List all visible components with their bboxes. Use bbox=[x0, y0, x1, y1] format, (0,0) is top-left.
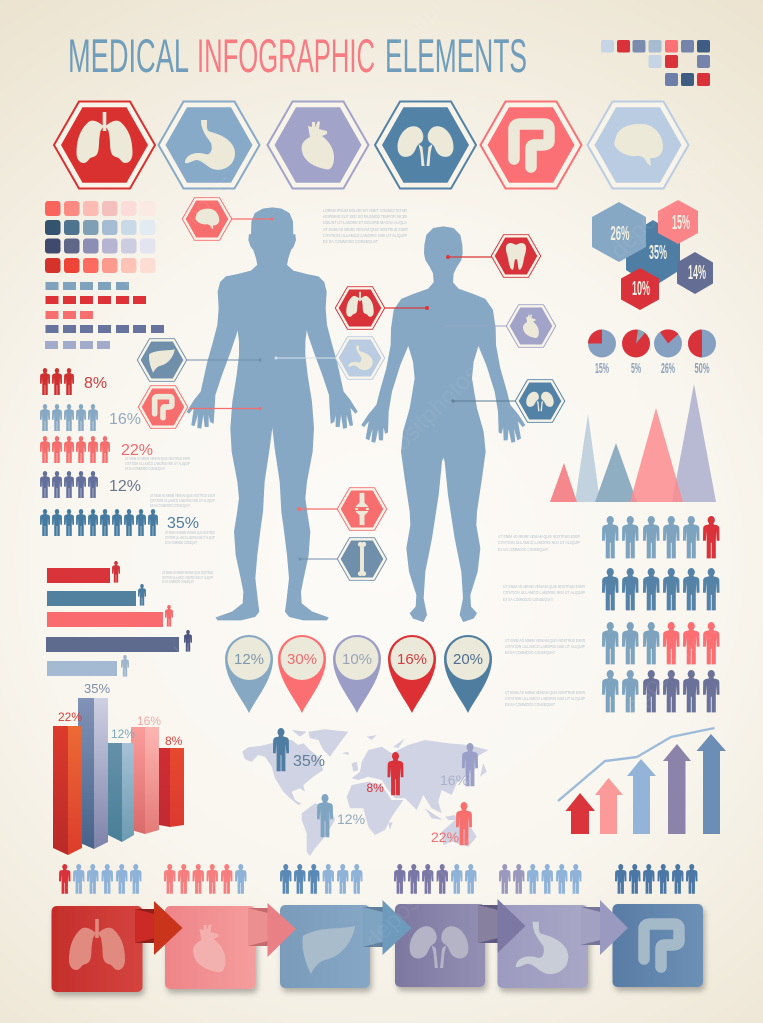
row 22%: 22% bbox=[121, 442, 153, 459]
row 16%: 16% bbox=[109, 411, 141, 428]
callout: knee joint bbox=[297, 488, 387, 530]
icon: panel stomach bbox=[516, 922, 568, 974]
watermark: depositphotos bbox=[360, 359, 485, 484]
callout: lungs bbox=[335, 287, 429, 329]
pin 10%: 10% bbox=[342, 651, 372, 668]
japan bbox=[480, 763, 487, 777]
small caption text left: UT ENIM AD MINIM VENIAM QUIS NOSTRUD bbox=[162, 570, 213, 575]
people grid right bbox=[602, 516, 720, 712]
hexagon cluster chart: 14% bbox=[688, 262, 706, 284]
male body silhouette bbox=[187, 208, 357, 620]
colour swatch palette bbox=[45, 201, 156, 273]
lorem text blocks right: UT ENIM AD MINIM VENIAM QUIS NOSTRUD EXER bbox=[505, 638, 585, 643]
3D bar chart: 12% bbox=[111, 727, 135, 741]
segmented bars bbox=[45, 282, 164, 349]
marker 35% bbox=[273, 728, 325, 771]
row 12% bbox=[40, 471, 141, 498]
pie 15%: 15% bbox=[595, 360, 609, 377]
arrow 5 bbox=[580, 900, 628, 955]
trend line bbox=[558, 728, 714, 801]
small caption text left: UT ENIM AD MINIM VENIAM QUIS NOSTRUD EXER bbox=[150, 493, 215, 498]
lorem text blocks right: CITATION ULLAMCO LABORIS NISI UT ALIQUIP bbox=[505, 696, 585, 701]
lorem text block centre: LOREM IPSUM DOLOR SIT AMET CONSECTETUR bbox=[323, 208, 408, 213]
lorem text blocks right: CITATION ULLAMCO LABORIS NISI UT ALIQUIP bbox=[503, 590, 585, 595]
group 2 bbox=[164, 864, 246, 894]
marker 35%: 35% bbox=[293, 753, 325, 770]
arrow 5 bbox=[696, 734, 726, 834]
watermark: depositphotos bbox=[115, 169, 240, 294]
hexagon cluster chart: 35% bbox=[649, 242, 667, 264]
row 35% bbox=[40, 509, 199, 536]
britain bbox=[352, 762, 358, 772]
female body silhouette bbox=[362, 227, 525, 622]
pie 5%: 5% bbox=[631, 360, 641, 377]
pie 26%: 26% bbox=[661, 360, 675, 377]
arrow 4 bbox=[478, 899, 526, 953]
marker 8% bbox=[366, 752, 404, 795]
icon: panel heart bbox=[193, 924, 226, 972]
lorem text block centre bbox=[323, 208, 409, 244]
lorem text blocks right bbox=[498, 534, 585, 707]
callout: bone bbox=[298, 538, 387, 580]
3D bar chart bbox=[53, 681, 184, 855]
australia bbox=[442, 820, 477, 847]
eurasia bbox=[352, 740, 488, 813]
group 6 bbox=[615, 864, 698, 894]
icon: brain hexagon bbox=[588, 102, 688, 188]
lorem text blocks right: CITATION ULLAMCO LABORIS NISI UT ALIQUIP bbox=[498, 540, 580, 545]
marker 22%: 22% bbox=[431, 829, 459, 845]
pin 16%: 16% bbox=[397, 651, 427, 668]
triangle chart bbox=[550, 384, 716, 502]
icon: kidneys hexagon bbox=[375, 102, 476, 188]
small caption text left: EX EA COMMODO CONSEQUAT bbox=[150, 503, 190, 508]
people percentage rows bbox=[40, 368, 199, 536]
pin 30%: 30% bbox=[287, 651, 317, 668]
small caption text left bbox=[125, 456, 215, 584]
lorem text blocks right: EX EA COMMODO CONSEQUAT bbox=[505, 650, 555, 655]
row 8%: 8% bbox=[84, 375, 107, 392]
row 22% bbox=[40, 436, 153, 463]
arrow 2 bbox=[595, 778, 623, 834]
novaya zemlya bbox=[393, 738, 405, 748]
callout: tooth bbox=[446, 235, 541, 277]
rising arrows chart bbox=[558, 728, 726, 834]
svalbard bbox=[367, 735, 377, 740]
arrow 1 bbox=[135, 901, 182, 955]
callout: kidneys bbox=[451, 380, 565, 422]
new guinea bbox=[445, 815, 458, 820]
watermark bbox=[105, 0, 735, 954]
arctic island bbox=[292, 730, 307, 737]
pin 20%: 20% bbox=[453, 651, 483, 668]
small caption text left: EX EA COMMODO CONSEQUAT bbox=[125, 466, 165, 471]
iceland bbox=[342, 752, 349, 755]
pin 12%: 12% bbox=[234, 651, 264, 668]
pie 50%: 50% bbox=[694, 360, 710, 377]
title: INFOGRAPHIC bbox=[197, 29, 375, 82]
arrow 4 bbox=[663, 744, 691, 834]
row 35%: 35% bbox=[167, 515, 199, 532]
arrow 3 bbox=[362, 900, 412, 955]
greenland bbox=[308, 729, 348, 757]
small caption text left: EX EA COMMODO CONSEQUAT bbox=[162, 579, 194, 584]
lorem text blocks right: EX EA COMMODO CONSEQUAT bbox=[503, 597, 553, 602]
pin 10% bbox=[333, 635, 381, 713]
watermark: depositphotos bbox=[610, 604, 735, 729]
people above panels bbox=[59, 864, 698, 894]
lorem text blocks right: EX EA COMMODO CONSEQUAT bbox=[505, 702, 555, 707]
lorem text block centre: DIDUNT UT LABORE ET DOLORE MAGNA ALIQUA bbox=[323, 220, 408, 225]
callout: liver bbox=[137, 339, 262, 381]
pin 20% bbox=[444, 635, 492, 713]
icon: lungs hexagon bbox=[54, 102, 155, 188]
arrow 2 bbox=[248, 903, 296, 957]
madagascar bbox=[388, 822, 393, 830]
pin 16% bbox=[388, 635, 436, 713]
south america bbox=[302, 803, 335, 856]
panel: heart bbox=[165, 906, 256, 989]
pin 30% bbox=[278, 635, 326, 713]
small caption text left: CITATION ULLAMCO LABORIS NISI UT ALIQUIP bbox=[150, 498, 215, 503]
marker 8%: 8% bbox=[366, 781, 384, 795]
panel: intestine bbox=[612, 904, 703, 987]
icon: heart hexagon bbox=[268, 102, 368, 188]
north america bbox=[242, 740, 323, 805]
group 5 bbox=[499, 864, 582, 894]
lorem text block centre: UT ENIM AD MINIM VENIAM QUIS NOSTRUD EXER bbox=[323, 227, 409, 232]
lorem text blocks right: EX EA COMMODO CONSEQUAT bbox=[498, 547, 548, 552]
world map bbox=[242, 729, 488, 856]
group 1 bbox=[59, 864, 142, 894]
hexagon cluster chart: 15% bbox=[672, 212, 690, 234]
icon: panel intestine bbox=[644, 924, 679, 967]
row 12%: 12% bbox=[109, 478, 141, 495]
row 8% bbox=[40, 368, 107, 395]
grid row 3 bbox=[602, 622, 720, 664]
indonesia bbox=[425, 808, 443, 820]
icon: stomach hexagon bbox=[158, 102, 260, 188]
pin 12% bbox=[225, 635, 273, 713]
callout: intestine bbox=[138, 386, 262, 428]
grid row 2 bbox=[602, 568, 720, 610]
watermark: depositphotos bbox=[605, 139, 730, 264]
lorem text block centre: ADIPISING ELIT SED DO EIUSMOD TEMPOR INCIDI bbox=[323, 214, 407, 219]
lorem text block centre: EX EA COMMODO CONSEQUAT bbox=[323, 239, 378, 244]
map markers bbox=[273, 728, 478, 845]
marker 16%: 16% bbox=[440, 772, 468, 788]
process panels with arrows bbox=[52, 899, 703, 992]
lorem text blocks right: UT ENIM AD MINIM VENIAM QUIS NOSTRUD EXER bbox=[505, 690, 585, 695]
callout: brain bbox=[182, 198, 274, 240]
panel: lungs bbox=[52, 906, 142, 992]
hexagon cluster chart: 10% bbox=[632, 278, 650, 300]
hexagon cluster chart: 26% bbox=[610, 223, 630, 245]
small caption text left: CITATION ULLAMCO LABORIS NISI UT ALIQUIP bbox=[162, 575, 213, 580]
lorem text blocks right: CITATION ULLAMCO LABORIS NISI UT ALIQUIP bbox=[505, 644, 585, 649]
panel: liver bbox=[280, 905, 370, 988]
icon: intestine hexagon bbox=[480, 102, 582, 188]
lorem text blocks right: UT ENIM AD MINIM VENIAM QUIS NOSTRUD EXER bbox=[498, 534, 580, 539]
location pins bbox=[225, 635, 492, 713]
africa bbox=[347, 782, 403, 835]
arrow 3 bbox=[627, 759, 656, 834]
3D bar chart: 8% bbox=[165, 734, 183, 748]
title: ELEMENTS bbox=[385, 29, 527, 82]
small caption text left: UT ENIM AD MINIM VENIAM QUIS NOSTRUD EXER bbox=[125, 456, 190, 461]
small caption text left: EX EA COMMODO CONSEQUAT bbox=[165, 540, 197, 545]
group 3 bbox=[280, 864, 362, 894]
title: MEDICAL bbox=[68, 29, 189, 82]
callout: stomach bbox=[274, 337, 385, 379]
hexagon cluster chart bbox=[592, 200, 713, 310]
arrow 1 bbox=[566, 793, 595, 834]
decorative colour squares top right bbox=[601, 40, 710, 86]
grid row 1 bbox=[602, 516, 720, 558]
3D bar chart: 16% bbox=[137, 714, 161, 728]
grid row 4 bbox=[602, 670, 720, 712]
callout: heart bbox=[443, 305, 556, 347]
organ hexagon row bbox=[54, 102, 688, 188]
watermark: depositphotos bbox=[105, 604, 230, 729]
icon: panel kidneys bbox=[410, 926, 468, 968]
icon: panel liver bbox=[302, 926, 355, 974]
pie charts row bbox=[588, 329, 716, 377]
3D bar chart: 35% bbox=[84, 681, 110, 696]
lorem text block centre: CITATION ULLAMCO LABORIS NISI UT ALIQUIP bbox=[323, 233, 407, 238]
panel: kidneys bbox=[395, 904, 485, 987]
small caption text left: UT ENIM AD MINIM VENIAM QUIS NOSTRUD bbox=[165, 530, 215, 535]
marker 16% bbox=[440, 743, 478, 788]
row 16% bbox=[40, 404, 141, 431]
horizontal person bars bbox=[46, 561, 192, 677]
text: CITATION ULLAMCO LABORIS NISI UT ALIQUIP bbox=[165, 535, 215, 540]
marker 12%: 12% bbox=[337, 811, 365, 827]
small caption text left: CITATION ULLAMCO LABORIS NISI UT ALIQUIP bbox=[125, 461, 190, 466]
marker 22% bbox=[431, 802, 472, 845]
icon: panel lungs bbox=[69, 919, 125, 970]
marker 12% bbox=[317, 794, 365, 837]
lorem text blocks right: UT ENIM AD MINIM VENIAM QUIS NOSTRUD EXER bbox=[503, 584, 585, 589]
watermark: depositphotos bbox=[360, 829, 485, 954]
panel: stomach bbox=[498, 905, 588, 988]
group 4 bbox=[394, 864, 476, 894]
3D bar chart: 22% bbox=[58, 710, 82, 724]
